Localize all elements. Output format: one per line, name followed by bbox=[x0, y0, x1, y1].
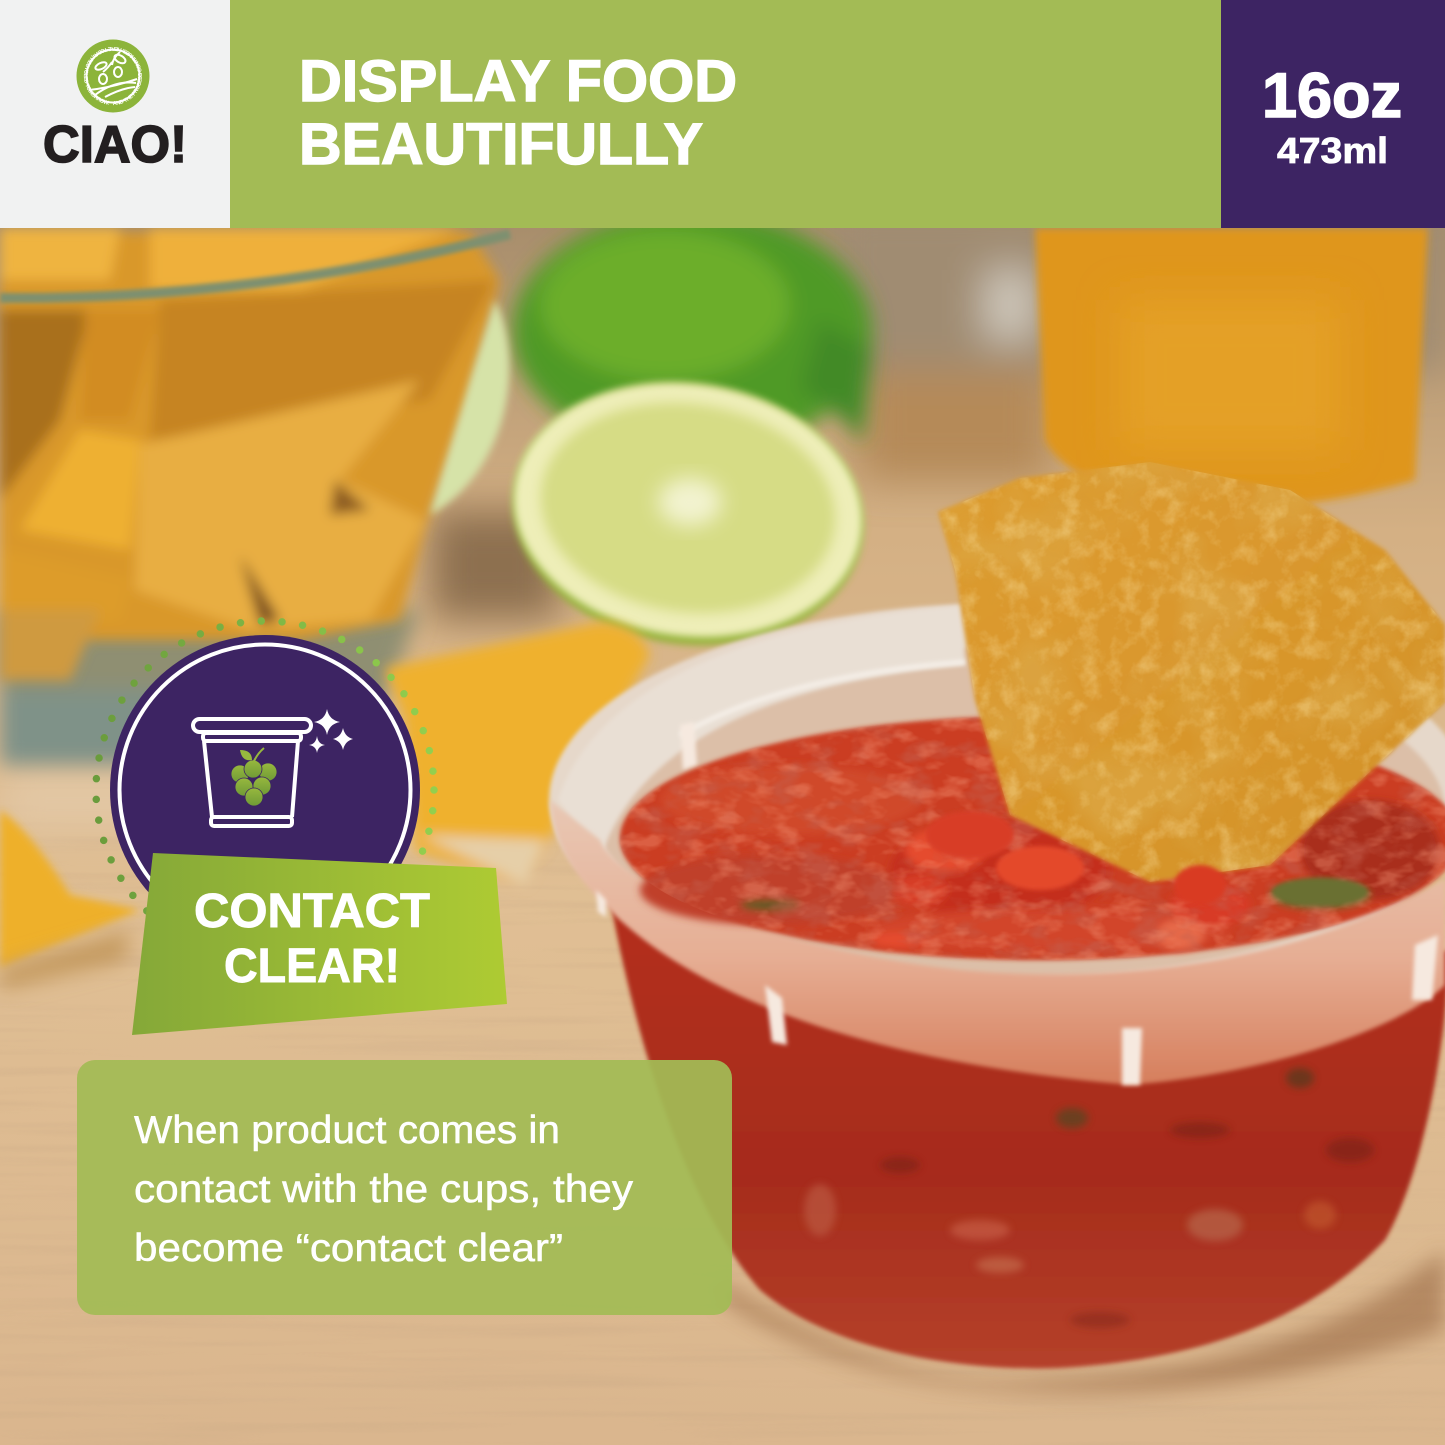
cup rim bbox=[549, 603, 1445, 997]
wooden table background bbox=[0, 228, 1445, 532]
salsa surface bbox=[620, 716, 1445, 960]
halved lime bbox=[508, 376, 867, 651]
cup body with salsa bbox=[610, 900, 1445, 1368]
callout text: contact with the cups, they bbox=[134, 1168, 634, 1211]
header: size panel bbox=[1221, 0, 1445, 228]
blurred background wall bbox=[0, 200, 1445, 830]
icon: cup with grapes bbox=[193, 719, 311, 826]
purple circle bbox=[110, 635, 420, 945]
callout text bbox=[134, 1109, 634, 1270]
size: 473ml bbox=[1277, 130, 1388, 171]
banner text bbox=[194, 885, 430, 993]
chips in bowl bbox=[0, 228, 500, 680]
rim ticks bbox=[596, 722, 1438, 1085]
salsa specks bbox=[804, 1068, 1374, 1328]
banner text: CLEAR! bbox=[224, 940, 400, 993]
header: title panel bbox=[230, 0, 1221, 228]
whole lime bbox=[512, 210, 872, 454]
lime slice behind bowl bbox=[430, 300, 509, 515]
plastic cup with salsa bbox=[549, 603, 1445, 1368]
left tortilla chip bbox=[0, 810, 140, 968]
callout text: When product comes in bbox=[134, 1109, 560, 1152]
banner text: CONTACT bbox=[194, 885, 430, 938]
salsa chunks in front of chip bbox=[926, 811, 1368, 906]
title bbox=[299, 49, 737, 177]
header: logo panel bbox=[0, 0, 230, 228]
orange juice glass bbox=[1035, 228, 1428, 507]
title: BEAUTIFULLY bbox=[299, 112, 703, 177]
icon: sparkles bbox=[309, 709, 353, 753]
shadow of cup bbox=[720, 1250, 1445, 1393]
logo badge: AND THE PROCESS CONTINUES. HERE TODAY, RECYCLED TOMORROW. bbox=[84, 47, 142, 106]
glass bowl base bbox=[0, 610, 420, 765]
banner bbox=[132, 853, 507, 1035]
front rim band bbox=[550, 800, 1445, 1085]
salsa chunks texture bbox=[620, 718, 1445, 960]
dotted ring bbox=[96, 621, 434, 959]
large tortilla chip dipped in salsa bbox=[930, 455, 1445, 890]
badge: contact clear bbox=[96, 621, 507, 1035]
size: 16oz bbox=[1262, 61, 1402, 131]
size bbox=[1262, 61, 1402, 171]
callout text: become “contact clear” bbox=[134, 1227, 563, 1270]
background tortilla chip bbox=[385, 622, 650, 885]
bowl rim bbox=[0, 234, 510, 298]
callout panel bbox=[77, 1060, 732, 1315]
logo wordmark: CIAO! bbox=[43, 116, 187, 174]
chip texture bbox=[930, 455, 1445, 890]
glass bowl of chips bbox=[0, 228, 510, 765]
title: DISPLAY FOOD bbox=[299, 49, 737, 114]
